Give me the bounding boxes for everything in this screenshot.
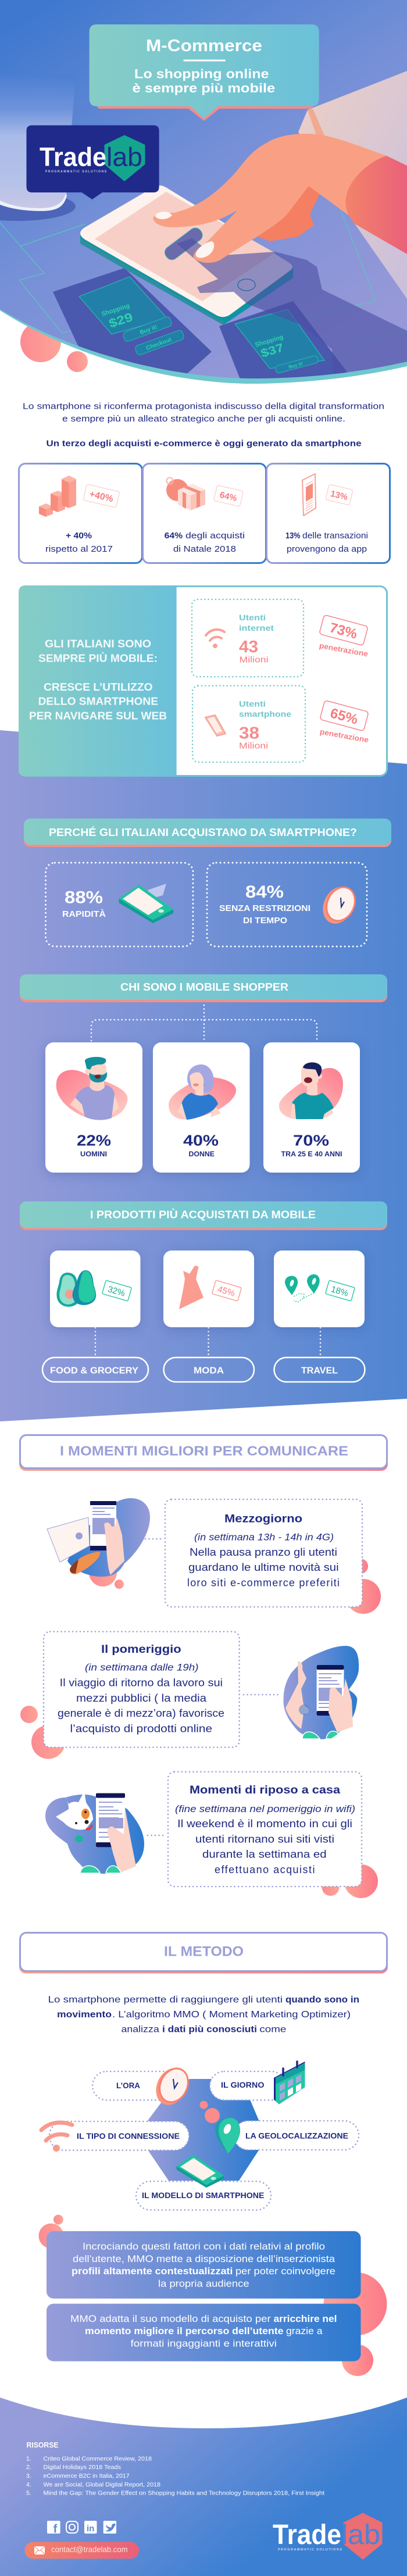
hero illustration	[0, 0, 407, 395]
card: uomini	[45, 1042, 142, 1173]
box behind hand	[298, 71, 407, 299]
illustration: rest at home with dog	[45, 1792, 144, 1874]
sources: 4.	[26, 2481, 31, 2488]
stat card: 64%	[143, 464, 266, 563]
box: utenti internet	[192, 599, 304, 677]
card: 25-40 anni	[263, 1042, 360, 1173]
box: mezzogiorno	[165, 1499, 362, 1607]
card: donne	[153, 1042, 250, 1173]
decoration: circles near first text panel	[38, 2215, 64, 2249]
sources: 5.	[26, 2490, 31, 2497]
box: mezzogiorno: loro siti e-commerce preferiti	[187, 1577, 340, 1588]
box: mezzogiorno: (in settimana 13h - 14h in 4G)	[194, 1531, 334, 1543]
icon: clock	[317, 882, 360, 928]
panel: mmo adatta: grazie a	[286, 2325, 323, 2336]
pill: il giorno: IL GIORNO	[221, 2080, 265, 2089]
icon: smartphone	[205, 715, 226, 736]
blob	[56, 1070, 127, 1120]
character: woman	[177, 1064, 221, 1120]
card: food	[50, 1251, 141, 1327]
blue section background	[0, 730, 407, 1421]
pill: moda: MODA	[194, 1366, 224, 1375]
method intro text: come	[259, 2024, 287, 2035]
box: utenti internet: Utenti	[239, 613, 266, 622]
icon: bar blocks	[39, 476, 76, 517]
box: momenti di riposo: Momenti di riposo a casa	[190, 1784, 340, 1796]
box: il pomeriggio	[44, 1631, 240, 1748]
stat card: +40%: + 40%	[66, 531, 92, 541]
panel heading text: GLI ITALIANI SONO	[45, 637, 151, 650]
card: uomini: UOMINI	[80, 1151, 107, 1158]
tag: 73% penetrazione	[319, 614, 369, 658]
pill: modello smartphone: IL MODELLO DI SMARTPHONE	[142, 2191, 264, 2200]
logo badge: lab	[106, 142, 142, 172]
dotted tree connector	[91, 1005, 317, 1041]
icon: dress	[179, 1266, 204, 1309]
method intro text: Lo smartphone permette di raggiungere gli utenti	[48, 1995, 283, 2005]
stat card: +40%	[19, 464, 142, 563]
sources: Digital Holidays 2018 Teads	[43, 2464, 121, 2471]
card: travel	[274, 1251, 365, 1327]
panel: incrociando: per poter coinvolgere	[235, 2266, 335, 2277]
intro text	[23, 401, 384, 424]
box: senza restrizioni: 84%	[245, 883, 284, 902]
icon: wifi	[206, 630, 224, 648]
tag: 65% penetrazione: penetrazione	[319, 727, 369, 744]
paper: shopping 29: $29	[107, 310, 134, 331]
box: momenti di riposo: Il weekend è il momento in cui gli	[177, 1818, 352, 1830]
paper: shopping 29	[53, 269, 212, 373]
panel: incrociando: Incrociando questi fattori con i dati relativi al profilo	[83, 2241, 325, 2252]
pill: moda	[164, 1357, 254, 1382]
box: rapidità	[45, 863, 193, 946]
icon: avocado	[56, 1270, 96, 1307]
box: senza restrizioni: SENZA RESTRIZIONI	[219, 903, 310, 913]
panel heading text: PER NAVIGARE SUL WEB	[29, 709, 167, 722]
tag: 18%	[330, 1284, 349, 1299]
banner: il metodo: IL METODO	[164, 1944, 244, 1959]
sources: RISORSE	[27, 2441, 59, 2449]
illustration: commuter with phone	[284, 1646, 359, 1739]
stat card: 13%: 13%	[285, 531, 300, 541]
icon: pin	[215, 2118, 240, 2153]
footer logo: lab	[341, 2520, 380, 2550]
icon: phone with arrow	[119, 884, 173, 923]
bubbles	[199, 2101, 220, 2123]
subheading	[133, 66, 275, 95]
decoration: coral circles under hero	[20, 321, 88, 372]
tag: +40%	[88, 490, 114, 504]
tag: 65% penetrazione: 65%	[329, 705, 359, 728]
subheading: è sempre più mobile	[133, 81, 275, 95]
hero teal edge	[0, 291, 407, 384]
icon: twitter	[103, 2521, 116, 2534]
box: il pomeriggio: Il pomeriggio	[101, 1644, 181, 1656]
panel: mmo adatta: momento migliore il percorso dell’utente	[85, 2325, 284, 2336]
card: 25-40 anni: 70%	[293, 1131, 329, 1149]
banner: chi sono: CHI SONO I MOBILE SHOPPER	[120, 981, 288, 993]
box: momenti di riposo: durante la settimana ed	[202, 1849, 327, 1860]
card: 25-40 anni: TRA 25 E 40 ANNI	[281, 1151, 342, 1158]
box: utenti smartphone: 38	[239, 724, 259, 743]
tag: 45%	[216, 1284, 236, 1299]
stat card: 64%: di Natale 2018	[173, 544, 236, 554]
panel heading text: CRESCE L’UTILIZZO	[44, 681, 152, 693]
sources: We are Social, Global Digital Report, 2018	[43, 2481, 160, 2488]
stat card: 64%: degli acquisti	[185, 531, 245, 541]
decoration: circles right of text panels	[323, 2272, 387, 2376]
panel: incrociando: profili altamente contestualizzati	[72, 2266, 233, 2277]
tag	[83, 484, 120, 508]
decoration: circles below riposo	[322, 1864, 378, 1898]
sources: Criteo Global Commerce Review, 2018	[43, 2456, 152, 2463]
pill: modello smartphone	[136, 2181, 271, 2210]
pill: food & grocery	[42, 1357, 148, 1382]
sources: 2.	[26, 2464, 31, 2471]
intro text: Lo smartphone si riconferma protagonista indiscusso della digital transformation	[23, 401, 384, 412]
hexagon	[148, 2079, 259, 2181]
tag	[214, 485, 243, 506]
decoration: circles left of pomeriggio	[20, 1706, 65, 1759]
connector	[244, 1694, 279, 1695]
tag	[212, 1280, 241, 1301]
icon: phone with page	[302, 474, 316, 516]
pill: il giorno	[210, 2071, 285, 2100]
box: utenti internet: internet	[239, 623, 274, 633]
box: momenti di riposo: (fine settimana nel pomeriggio in wifi)	[175, 1803, 355, 1814]
box: rapidità: RAPIDITÀ	[62, 909, 106, 919]
paper: shopping 37: Shopping	[254, 334, 284, 349]
box: mezzogiorno: guardano le ultime novità sui	[188, 1562, 339, 1573]
panel: incrociando: dell’utente, MMO mette a disposizione dell’inserzionista	[73, 2253, 335, 2264]
desk guide lines	[0, 195, 407, 342]
box: momenti di riposo: effettuano acquisti	[215, 1864, 315, 1875]
character: bearded man	[70, 1057, 119, 1120]
pill: tipo di connessione: IL TIPO DI CONNESSIONE	[77, 2131, 180, 2141]
panel: mmo adatta: formati ingaggianti e interattivi	[130, 2338, 277, 2349]
card: moda	[163, 1251, 254, 1327]
pill: geolocalizzazione: LA GEOLOCALIZZAZIONE	[245, 2131, 348, 2141]
box: utenti internet: 43	[239, 638, 258, 656]
method intro text: movimento	[57, 2010, 112, 2020]
box: il pomeriggio: generale è di mezz’ora) favorisce	[58, 1707, 224, 1719]
tag: 32%	[106, 1284, 126, 1299]
box: il pomeriggio: mezzi pubblici ( la media	[76, 1692, 207, 1704]
pill: l'ora	[92, 2071, 180, 2100]
sources: 3.	[26, 2473, 31, 2479]
method intro text: analizza	[121, 2024, 159, 2035]
pill: geolocalizzazione	[234, 2121, 359, 2150]
connector	[145, 1538, 163, 1539]
card: donne: DONNE	[188, 1151, 215, 1158]
blob	[169, 1077, 236, 1120]
box: utenti internet: Milioni	[240, 655, 269, 665]
footer background	[0, 2398, 407, 2576]
banner: chi sono	[20, 974, 387, 1002]
panel heading text: DELLO SMARTPHONE	[38, 695, 158, 707]
paper: shopping 29: Buy it!	[139, 324, 158, 336]
box: utenti smartphone: Milioni	[239, 741, 268, 751]
dotted connectors to pills	[95, 1328, 320, 1356]
box: senza restrizioni	[207, 863, 367, 946]
stat card: 13%: provengono da app	[287, 544, 367, 554]
box: senza restrizioni: DI TEMPO	[243, 916, 287, 926]
icon: facebook: f	[53, 2523, 58, 2536]
logo badge: PROGRAMMATIC SOLUTIONS	[45, 170, 107, 173]
icon: linkedin: in	[87, 2524, 94, 2534]
tag: 65% penetrazione	[319, 700, 369, 744]
tag	[326, 484, 353, 505]
social icons	[47, 2521, 116, 2536]
icon: gift and ornament	[166, 478, 205, 510]
box: il pomeriggio: l’acquisto di prodotti online	[70, 1723, 212, 1735]
box: utenti smartphone	[192, 686, 305, 762]
subheading: Lo shopping online	[134, 66, 269, 81]
banner: momenti migliori: I MOMENTI MIGLIORI PER COMUNICARE	[60, 1443, 348, 1458]
panel: incrociando	[47, 2231, 360, 2299]
sleeve	[345, 156, 407, 254]
tag: 73% penetrazione: penetrazione	[319, 641, 369, 658]
app bar on screen	[164, 228, 203, 260]
footer logo: PROGRAMMATIC SOLUTIONS	[278, 2548, 342, 2552]
method intro text: quando sono in	[285, 1995, 359, 2005]
illustration: lunch break	[47, 1498, 150, 1589]
panel: italiani mobile	[19, 585, 387, 777]
logo badge	[27, 126, 159, 199]
stat card: 64%: 64%	[165, 531, 183, 541]
tag: 13%	[330, 489, 349, 502]
banner: perché: PERCHÉ GLI ITALIANI ACQUISTANO DA SMARTPHONE?	[49, 826, 357, 838]
icon: map pins	[285, 1274, 320, 1302]
tag: 73% penetrazione: 73%	[328, 620, 359, 642]
method intro text: i dati più conosciuti	[162, 2024, 257, 2035]
icon: clock	[150, 2063, 194, 2110]
banner: il metodo	[19, 1932, 388, 1973]
box: utenti smartphone: Utenti	[239, 699, 266, 708]
banner: prodotti: I PRODOTTI PIÙ ACQUISTATI DA MOBILE	[90, 1208, 316, 1221]
panel: mmo adatta	[47, 2304, 360, 2361]
sources: eCommerce B2C in Italia, 2017	[43, 2473, 130, 2479]
logo badge: Trade	[40, 142, 106, 172]
banner: momenti migliori	[19, 1435, 388, 1471]
icon: smartphone under hand	[80, 185, 293, 325]
box: il pomeriggio: (in settimana dalle 19h)	[85, 1662, 199, 1673]
intro bold line: Un terzo degli acquisti e-commerce è oggi generato da smartphone	[47, 438, 362, 449]
card: donne: 40%	[183, 1131, 219, 1149]
pill: travel	[274, 1357, 365, 1382]
banner: prodotti	[20, 1201, 387, 1230]
intro text: e sempre più un alleato strategico anche per gli acquisti online.	[62, 414, 345, 424]
pill: food & grocery: FOOD & GROCERY	[50, 1366, 138, 1375]
character: young man	[291, 1062, 334, 1119]
icon: coffee cup	[0, 76, 76, 221]
method diagram	[41, 2061, 359, 2210]
pill: l'ora: L’ORA	[116, 2081, 140, 2090]
box: rapidità: 88%	[65, 888, 103, 907]
hand	[153, 134, 387, 263]
banner: perché	[24, 819, 391, 847]
tag: 64%	[219, 490, 238, 503]
box: mezzogiorno: Nella pausa pranzo gli utenti	[190, 1546, 337, 1558]
decoration: circles right of mezzogiorno	[346, 1559, 381, 1614]
paper: shopping 29: Checkout	[145, 337, 173, 352]
paper: shopping 37: $37	[259, 341, 285, 360]
icon: instagram	[66, 2521, 78, 2533]
icon: calendar	[274, 2061, 305, 2105]
box: utenti smartphone: smartphone	[239, 709, 291, 719]
blob	[279, 1068, 343, 1120]
sources	[26, 2441, 324, 2497]
sources: Mind the Gap: The Gender Effect on Shopping Habits and Technology Disruptors 2018, First Insight	[43, 2490, 324, 2497]
box: mezzogiorno: Mezzogiorno	[224, 1513, 302, 1525]
tag	[102, 1280, 131, 1301]
pill: travel: TRAVEL	[301, 1366, 338, 1375]
panel: incrociando: la propria audience	[158, 2278, 249, 2289]
connector	[148, 1835, 166, 1836]
footer logo: Trade	[273, 2520, 341, 2550]
stat card: +40%: rispetto al 2017	[45, 544, 113, 554]
paper: shopping 29: Shopping	[101, 302, 130, 318]
tag	[326, 1280, 355, 1301]
card: uomini: 22%	[77, 1131, 111, 1149]
hand shadow	[177, 238, 407, 374]
icon: envelope	[34, 2546, 45, 2554]
paper: shopping 37	[219, 301, 348, 378]
title bubble	[90, 24, 319, 121]
panel: mmo adatta: MMO adatta il suo modello di acquisto per	[70, 2313, 271, 2324]
panel heading text: SEMPRE PIÙ MOBILE:	[38, 652, 158, 664]
stat card: 13%: delle transazioni	[302, 531, 368, 541]
method intro text	[48, 1995, 359, 2035]
heading: M-Commerce: M-Commerce	[146, 37, 262, 55]
panel heading text	[29, 637, 167, 722]
contact pill: contact@tradelab.com	[51, 2545, 128, 2554]
contact pill	[24, 2542, 139, 2559]
panel teal side	[19, 585, 177, 777]
method intro text: . L’algoritmo MMO ( Moment Marketing Optimizer)	[112, 2010, 351, 2020]
stat card: 13%	[266, 464, 390, 563]
box: momenti di riposo: utenti ritornano sui siti visti	[195, 1834, 334, 1845]
box: il pomeriggio: Il viaggio di ritorno da lavoro sui	[60, 1677, 223, 1688]
sources: 1.	[26, 2456, 31, 2463]
box: momenti di riposo	[168, 1772, 362, 1887]
panel: mmo adatta: arricchire nel	[273, 2313, 337, 2324]
icon: wifi	[41, 2123, 72, 2150]
paper: shopping 37: Buy it!	[288, 361, 304, 370]
footer logo	[273, 2514, 381, 2559]
pill: tipo di connessione	[49, 2121, 189, 2150]
icon: phone	[177, 2155, 224, 2188]
